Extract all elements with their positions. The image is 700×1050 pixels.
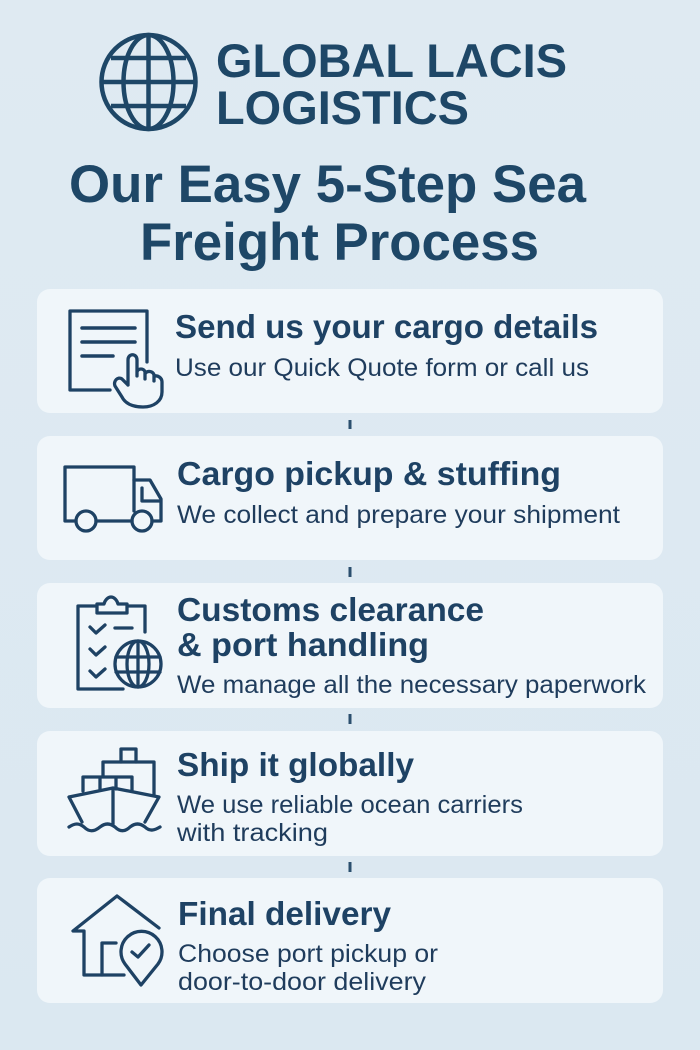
- step 4 text: Ship it globally: [177, 746, 415, 783]
- step 3 text: [177, 591, 647, 699]
- step 3 text: Customs clearance: [177, 591, 484, 628]
- company name: GLOBAL LACIS: [216, 34, 567, 87]
- icon: document with pointing hand: [70, 311, 162, 407]
- title: [69, 155, 587, 272]
- step 5 text: door-to-door delivery: [178, 968, 427, 996]
- title: Our Easy 5-Step Sea: [69, 155, 587, 214]
- step 5 text: Choose port pickup or: [178, 940, 438, 968]
- panel: step 3 customs clearance: [37, 583, 663, 708]
- panel: step 5 final delivery: [37, 878, 663, 1003]
- panel: step 1 send cargo details: [37, 289, 663, 413]
- panel: step 4 ship globally: [37, 731, 663, 856]
- icon: container ship: [69, 749, 160, 831]
- icon: globe logo: [102, 35, 196, 129]
- step 3 text: We manage all the necessary paperwork: [177, 671, 647, 699]
- panel: step 2 cargo pickup: [37, 436, 663, 560]
- step 4 text: [176, 746, 523, 847]
- step 2 text: We collect and prepare your shipment: [177, 501, 620, 529]
- step 5 text: [178, 895, 438, 996]
- icon: house with location pin: [73, 896, 162, 985]
- company name: [216, 34, 567, 134]
- step 1 text: Use our Quick Quote form or call us: [175, 354, 589, 382]
- step 3 text: & port handling: [177, 626, 429, 663]
- company name: LOGISTICS: [216, 81, 469, 134]
- step 1 text: [175, 308, 598, 382]
- step 4 text: with tracking: [176, 819, 328, 847]
- step 1 text: Send us your cargo details: [175, 308, 598, 345]
- step 2 text: [177, 455, 620, 529]
- step 2 text: Cargo pickup & stuffing: [177, 455, 561, 492]
- step 5 text: Final delivery: [178, 895, 392, 932]
- icon: checklist clipboard with globe: [78, 597, 161, 689]
- title: Freight Process: [140, 213, 539, 272]
- step 4 text: We use reliable ocean carriers: [177, 791, 523, 819]
- icon: delivery truck: [65, 467, 161, 531]
